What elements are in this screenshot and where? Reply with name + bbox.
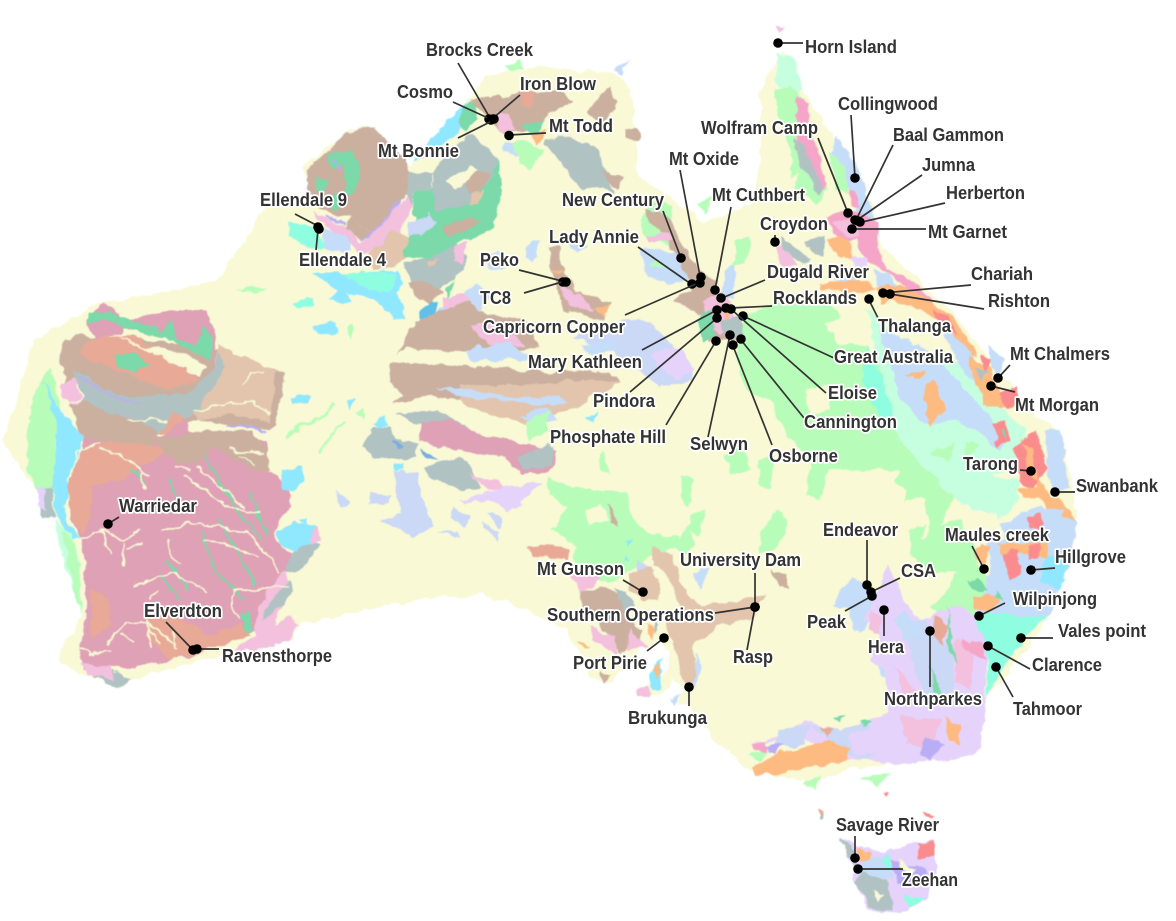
- mine: Zeehan: [853, 864, 958, 890]
- mine: Clarence: Clarence: [1032, 655, 1102, 675]
- mine: Wilpinjong: [974, 589, 1097, 621]
- mine: Jumna: Jumna: [922, 155, 976, 175]
- mine: Maules creek: Maules creek: [945, 525, 1050, 545]
- mine: Capricorn Copper: Capricorn Copper: [483, 317, 625, 337]
- mine: Mt Gunson: [537, 559, 648, 597]
- mine: Hillgrove: [1026, 547, 1126, 575]
- mine: Northparkes: [884, 626, 982, 709]
- mine: Rocklands: [721, 288, 857, 313]
- mine: Herberton: Herberton: [946, 183, 1025, 203]
- mine: Iron Blow: [488, 74, 597, 124]
- mine: Cosmo: [397, 82, 496, 125]
- mine: Swanbank: [1050, 476, 1159, 497]
- mine: Wilpinjong: Wilpinjong: [1013, 589, 1097, 609]
- mine: Rocklands: Rocklands: [773, 288, 857, 308]
- region: Kimberley: [287, 127, 413, 270]
- region: Western Australia coast: [27, 367, 83, 613]
- mine: Eloise: Eloise: [828, 383, 877, 403]
- mine: Port Pirie: Port Pirie: [573, 653, 647, 673]
- mine: Endeavor: Endeavor: [823, 520, 898, 540]
- mine: CSA: [866, 561, 936, 597]
- region: Cape York and north Queensland: [773, 25, 1020, 410]
- mine: Warriedar: Warriedar: [119, 496, 197, 516]
- mine: Savage River: [836, 815, 939, 863]
- mine: Clarence: [983, 641, 1102, 675]
- mine: Mt Morgan: [986, 381, 1099, 415]
- mine: Osborne: [728, 340, 838, 466]
- mine: Endeavor: [823, 520, 898, 590]
- mine: Ravensthorpe: [192, 644, 332, 666]
- mine: New Century: New Century: [562, 190, 664, 210]
- mine: Brocks Creek: Brocks Creek: [426, 40, 534, 60]
- mine: Rishton: [885, 289, 1050, 311]
- mine: Collingwood: [838, 94, 938, 183]
- mine: Hera: [868, 605, 905, 657]
- region: Halls Creek to Arunta: [313, 240, 695, 387]
- mine: CSA: CSA: [901, 561, 936, 581]
- mine: Port Pirie: [573, 633, 669, 673]
- mine: Mt Oxide: Mt Oxide: [669, 149, 739, 169]
- mine: University Dam: University Dam: [680, 550, 801, 570]
- mine: Iron Blow: Iron Blow: [520, 74, 597, 94]
- mine: Mary Kathleen: Mary Kathleen: [528, 352, 642, 372]
- mine: Cannington: [736, 334, 897, 432]
- mine: Selwyn: [690, 330, 748, 454]
- mine: Cannington: Cannington: [804, 412, 897, 432]
- mine: Mt Garnet: [847, 222, 1007, 242]
- mine: Mt Oxide: [669, 149, 739, 282]
- mine: Brukunga: [628, 682, 708, 728]
- mine: Wolfram Camp: [701, 118, 853, 218]
- mine: Croydon: Croydon: [760, 214, 828, 234]
- mine: Brukunga: Brukunga: [628, 708, 708, 728]
- mine: Tahmoor: [991, 662, 1082, 719]
- mine: Jumna: [853, 155, 976, 226]
- mine: TC8: [480, 277, 571, 308]
- mine: Elverdton: Elverdton: [144, 601, 222, 621]
- mine: Dugald River: Dugald River: [767, 262, 869, 282]
- mine: Savage River: Savage River: [836, 815, 939, 835]
- mine: Chariah: Chariah: [971, 264, 1033, 284]
- mine: Elverdton: [144, 601, 222, 655]
- mine: New Century: [562, 190, 686, 263]
- mine: Northparkes: Northparkes: [884, 689, 982, 709]
- mine: Ellendale 4: [299, 224, 386, 270]
- mine: Great Australia: [738, 311, 954, 367]
- mine: Warriedar: [103, 496, 197, 529]
- mine: Mt Bonnie: Mt Bonnie: [378, 141, 459, 161]
- region: South Australia ranges: [527, 538, 768, 705]
- mine: Dugald River: [716, 262, 869, 303]
- mine: Capricorn Copper: [483, 278, 705, 337]
- mine: Vales point: Vales point: [1058, 621, 1146, 641]
- mine: Lady Annie: Lady Annie: [549, 227, 639, 247]
- mine: Mt Gunson: Mt Gunson: [537, 559, 624, 579]
- mine: Horn Island: Horn Island: [805, 37, 897, 57]
- base: mainland outline: [3, 50, 1077, 783]
- mine: Mt Todd: Mt Todd: [549, 116, 613, 136]
- mine: Eloise: [726, 304, 877, 403]
- mine: Cosmo: Cosmo: [397, 82, 453, 102]
- mine: University Dam: [680, 550, 801, 612]
- mine: Mt Bonnie: [378, 114, 499, 161]
- mine: Peko: [480, 250, 568, 287]
- mine: Mt Morgan: Mt Morgan: [1015, 395, 1099, 415]
- mine: Pindora: [593, 313, 722, 411]
- mine: Phosphate Hill: Phosphate Hill: [550, 427, 666, 447]
- mine: Phosphate Hill: [550, 336, 721, 447]
- mine: Herberton: [855, 183, 1025, 227]
- mine: Ellendale 9: Ellendale 9: [260, 190, 347, 210]
- mine: Thalanga: Thalanga: [878, 316, 952, 336]
- mine: Mt Cuthbert: Mt Cuthbert: [712, 185, 805, 205]
- mine: Peak: [807, 591, 877, 632]
- mine: Maules creek: [945, 525, 1050, 574]
- mine: Mary Kathleen: [528, 305, 722, 372]
- mine: Tahmoor: Tahmoor: [1013, 699, 1082, 719]
- mine: Mt Chalmers: Mt Chalmers: [1010, 344, 1110, 364]
- mine: Ravensthorpe: Ravensthorpe: [222, 646, 332, 666]
- mine: Great Australia: Great Australia: [834, 347, 954, 367]
- mine: Hillgrove: Hillgrove: [1055, 547, 1126, 567]
- mine: Mt Todd: [504, 116, 613, 140]
- mine: Southern Operations: Southern Operations: [547, 605, 714, 625]
- mine: Mt Garnet: Mt Garnet: [928, 222, 1007, 242]
- mine: Selwyn: Selwyn: [690, 434, 748, 454]
- region: Queensland basins: [735, 298, 1077, 540]
- mine: Mt Cuthbert: [710, 185, 805, 295]
- mine: Collingwood: Collingwood: [838, 94, 938, 114]
- mine: Baal Gammon: Baal Gammon: [893, 125, 1004, 145]
- mine: Chariah: [878, 264, 1033, 298]
- region: Tasmania: [820, 793, 935, 913]
- mine: TC8: TC8: [480, 288, 511, 308]
- mine: Thalanga: [864, 294, 952, 336]
- region: New South Wales and Victoria: [750, 505, 1077, 788]
- mine: Baal Gammon: [850, 125, 1004, 225]
- mine: Wolfram Camp: Wolfram Camp: [701, 118, 818, 138]
- mine: Rasp: Rasp: [733, 647, 773, 667]
- mine: Zeehan: Zeehan: [902, 870, 958, 890]
- mine: Lady Annie: [549, 227, 697, 289]
- mine: Mt Chalmers: [993, 344, 1110, 383]
- region: Yilgarn Craton: [68, 407, 320, 688]
- region: central Australia: [362, 360, 880, 583]
- mine: Hera: Hera: [868, 637, 905, 657]
- region: Top End: [403, 60, 640, 260]
- region: Mt Isa Inlier: [640, 195, 750, 343]
- mine: Peko: Peko: [480, 250, 519, 270]
- mine: Ellendale 9: [260, 190, 347, 232]
- mine: Swanbank: Swanbank: [1076, 476, 1159, 496]
- mine: Rasp: [733, 602, 773, 667]
- mine: Osborne: Osborne: [769, 446, 838, 466]
- mine: Vales point: [1016, 621, 1146, 643]
- mine: Pindora: Pindora: [593, 391, 656, 411]
- mine: Ellendale 4: Ellendale 4: [299, 250, 386, 270]
- mine: Croydon: [760, 214, 828, 247]
- region: central desert patches: [235, 278, 392, 553]
- mine: Tarong: Tarong: [963, 454, 1018, 474]
- mine: Rishton: Rishton: [988, 291, 1050, 311]
- mine: Brocks Creek: [426, 40, 534, 124]
- region: Pilbara: [60, 303, 285, 433]
- mine: Peak: Peak: [807, 612, 847, 632]
